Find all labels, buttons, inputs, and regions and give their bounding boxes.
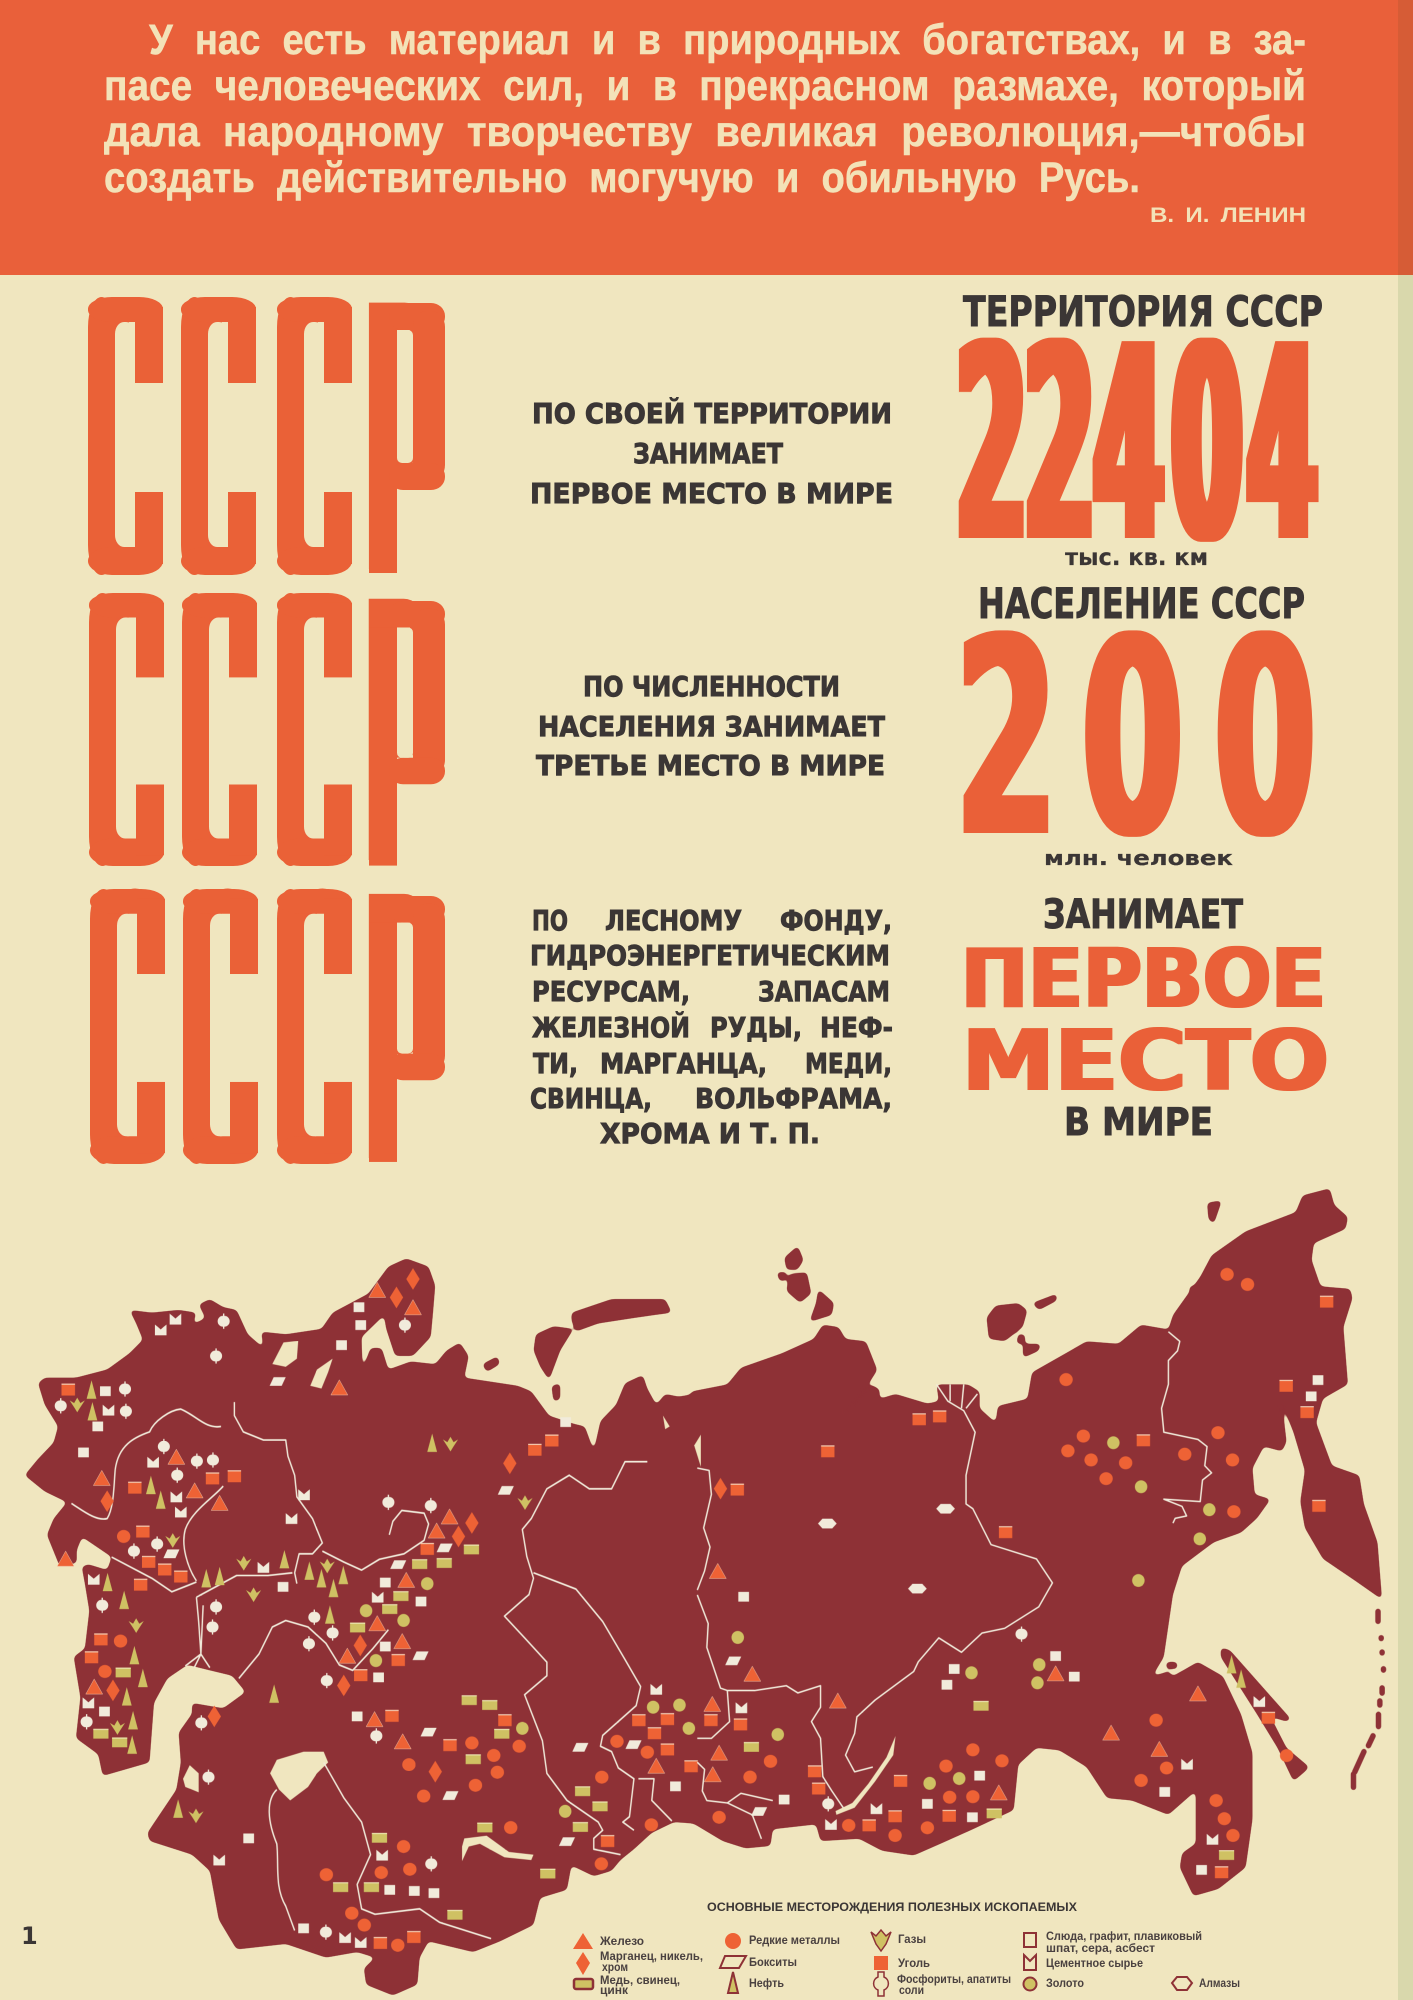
mineral markers east (704, 1268, 1333, 1878)
text block: resources rank: РЕСУРСАМ, (532, 975, 690, 1008)
stat: first place (961, 892, 1329, 1144)
stat number: 200: 200 (956, 579, 1315, 898)
quote attribution: В. И. ЛЕНИН (1150, 204, 1306, 227)
legend labels: Медь, свинец, (600, 1975, 680, 1987)
map east details (697, 1268, 1383, 1878)
legend labels: хром (602, 1962, 628, 1974)
stat: population (956, 579, 1315, 898)
legend labels: соли (899, 1985, 924, 1997)
text block: population rank: НАСЕЛЕНИЯ ЗАНИМАЕТ (538, 710, 885, 743)
legend labels (599, 1931, 1240, 1997)
text block: territory rank: ЗАНИМАЕТ (633, 437, 783, 470)
mineral markers west (55, 1268, 698, 1952)
legend labels: Уголь (898, 1958, 930, 1970)
legend labels: Слюда, графит, плавиковый (1046, 1931, 1202, 1943)
legend labels: Газы (898, 1934, 926, 1946)
highlight: первое место: ПЕРВОЕ (961, 932, 1326, 1027)
text block: territory rank: ПЕРВОЕ МЕСТО В МИРЕ (530, 477, 893, 510)
legend labels: Золото (1046, 1978, 1084, 1990)
landmass and islands (25, 1188, 1382, 1996)
row 1: СССР (83, 204, 442, 684)
text block: population rank: ТРЕТЬЕ МЕСТО В МИРЕ (536, 749, 885, 782)
text block: resources rank: МЕДИ, (805, 1047, 892, 1080)
legend labels: Бокситы (749, 1957, 797, 1969)
text block: resources rank: РУДЫ, (710, 1011, 802, 1044)
big heading: СССР three rows (83, 204, 445, 1272)
legend labels: Алмазы (1199, 1978, 1240, 1990)
legend labels: Фосфориты, апатиты (897, 1974, 1011, 1986)
legend labels: Нефть (749, 1978, 784, 1990)
text block: population rank: ПО ЧИСЛЕННОСТИ (583, 670, 840, 703)
stat unit: млн. человек (1044, 846, 1234, 870)
text block: resources rank (530, 904, 893, 1150)
quote text: пасе человеческих сил, и в прекрасном размахе, который (104, 62, 1306, 110)
text block: resources rank: НЕФ- (820, 1011, 893, 1044)
row 3: СССР (85, 795, 441, 1272)
text block: resources rank: СВИНЦА, (530, 1082, 652, 1115)
rivers west (71, 1402, 672, 1939)
text block: resources rank: ВОЛЬФРАМА, (695, 1082, 892, 1115)
legend title: ОСНОВНЫЕ МЕСТОРОЖДЕНИЯ ПОЛЕЗНЫХ ИСКОПАЕМЫХ (707, 1902, 1077, 1914)
stat unit: тыс. кв. км (1065, 545, 1208, 571)
quote text: создать действительно могучую и обильную Русь. (104, 154, 1140, 202)
text block: territory rank: ПО СВОЕЙ ТЕРРИТОРИИ (532, 396, 892, 430)
lakes and seas (183, 1341, 701, 1861)
highlight: первое место: МЕСТО (962, 1012, 1329, 1111)
Lake Baikal (836, 1736, 896, 1815)
legend labels: Редкие металлы (749, 1935, 840, 1947)
highlight: первое место (961, 932, 1329, 1111)
text block: resources rank: ЛЕСНОМУ (605, 904, 742, 937)
label: в мире: В МИРЕ (1064, 1100, 1213, 1144)
stat: territory (957, 287, 1323, 603)
page number: 1 (21, 1922, 38, 1950)
text block: resources rank: ГИДРОЭНЕРГЕТИЧЕСКИМ (530, 939, 890, 972)
legend labels: Железо (599, 1936, 644, 1948)
stat heading: territory: ТЕРРИТОРИЯ СССР (963, 287, 1323, 336)
text block: resources rank: ЖЕЛЕЗНОЙ (532, 1010, 690, 1044)
quote text (104, 16, 1306, 202)
map west details (55, 1268, 701, 1952)
legend labels: Марганец, никель, (600, 1951, 703, 1963)
Kuril islands (1353, 1612, 1383, 1787)
legend: main mineral deposits (573, 1902, 1240, 1997)
map: USSR mineral deposits (25, 1188, 1383, 1996)
panel: red quote banner (0, 0, 1413, 275)
rivers east (697, 1332, 1212, 1839)
legend icons (573, 1930, 1192, 1996)
legend labels: шпат, сера, асбест (1046, 1943, 1155, 1955)
legend labels: цинк (600, 1985, 628, 1997)
text block: territory rank (530, 396, 893, 510)
text block: resources rank: ТИ, (533, 1047, 578, 1080)
text block: resources rank: ПО (532, 904, 568, 937)
quote text: дала народному творчеству великая революция,—чтобы (104, 108, 1306, 156)
text block: resources rank: ЗАПАСАМ (758, 975, 890, 1008)
text block: resources rank: ФОНДУ, (780, 904, 892, 937)
text block: population rank (536, 670, 885, 782)
label: занимает: ЗАНИМАЕТ (1043, 892, 1244, 938)
row 2: СССР (84, 502, 441, 974)
text block: resources rank: ХРОМА И Т. П. (600, 1117, 820, 1150)
legend labels: Цементное сырье (1046, 1958, 1143, 1970)
stat heading: population: НАСЕЛЕНИЕ СССР (978, 579, 1305, 628)
stat number: 22404: 22404 (957, 289, 1317, 603)
text block: resources rank: МАРГАНЦА, (600, 1047, 767, 1080)
